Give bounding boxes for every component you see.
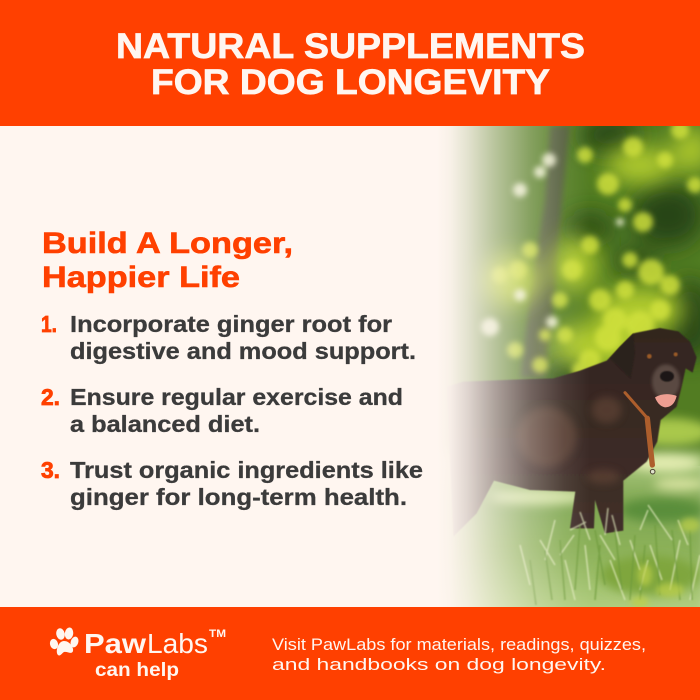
photo: sunlit ground patches <box>490 455 700 595</box>
footer message <box>272 635 646 674</box>
numbered list <box>41 311 423 510</box>
list item 3: Trust organic ingredients like <box>70 457 423 483</box>
photo: dark foliage patches <box>546 117 700 398</box>
footer message: Visit PawLabs for materials, readings, quizzes, <box>272 635 646 654</box>
header band <box>0 0 700 126</box>
logo wordmark: Paw <box>84 628 146 659</box>
list item 1: digestive and mood support. <box>70 338 416 364</box>
photo: tree trunk <box>520 126 570 378</box>
list item 1: Incorporate ginger root for <box>70 311 392 337</box>
dog: leash ring <box>650 469 655 474</box>
list item 2: Ensure regular exercise and <box>70 384 403 410</box>
title: FOR DOG LONGEVITY <box>151 63 550 102</box>
list item 3: 3. <box>41 457 60 483</box>
dog: tongue <box>655 394 677 407</box>
dog: eyes <box>647 352 678 359</box>
dog: muzzle <box>652 364 680 399</box>
photo: sunlit leaf glow <box>480 128 700 367</box>
list item 1: 1. <box>41 311 57 337</box>
dog: nose <box>660 371 674 382</box>
list item 2: a balanced diet. <box>70 411 260 437</box>
photo: foliage base <box>450 126 700 466</box>
footer message: and handbooks on dog longevity. <box>272 655 606 674</box>
heading <box>42 227 293 294</box>
heading: Build A Longer, <box>42 227 293 260</box>
title: NATURAL SUPPLEMENTS <box>116 27 585 66</box>
icon: paw <box>49 627 80 656</box>
list item 3 <box>41 457 423 510</box>
dog: coat highlights <box>517 397 622 484</box>
logo wordmark: Labs <box>147 628 208 659</box>
dog: body <box>447 328 697 537</box>
photo: dog standing in a sunny park <box>450 126 700 607</box>
photo: grass texture <box>520 505 700 605</box>
photo: hedge behind the dog <box>630 418 700 446</box>
logo wordmark <box>84 628 226 659</box>
photo: fade into background <box>420 126 590 607</box>
logo wordmark: TM <box>209 628 226 640</box>
photo: grass field <box>452 444 700 607</box>
photo: pale sun flares <box>481 153 624 336</box>
logo tagline: can help <box>95 660 179 681</box>
dog: collar and leash <box>625 393 652 465</box>
heading: Happier Life <box>42 261 240 294</box>
list item 2 <box>41 384 403 437</box>
list item 3: ginger for long-term health. <box>70 484 407 510</box>
photo: yellow-green clumps <box>631 518 700 608</box>
dog: ear <box>610 333 635 378</box>
title <box>116 27 585 102</box>
list item 1 <box>41 311 416 364</box>
list item 2: 2. <box>41 384 60 410</box>
footer band <box>0 607 700 700</box>
photo: bokeh highlights <box>492 121 700 378</box>
dog <box>447 328 697 537</box>
